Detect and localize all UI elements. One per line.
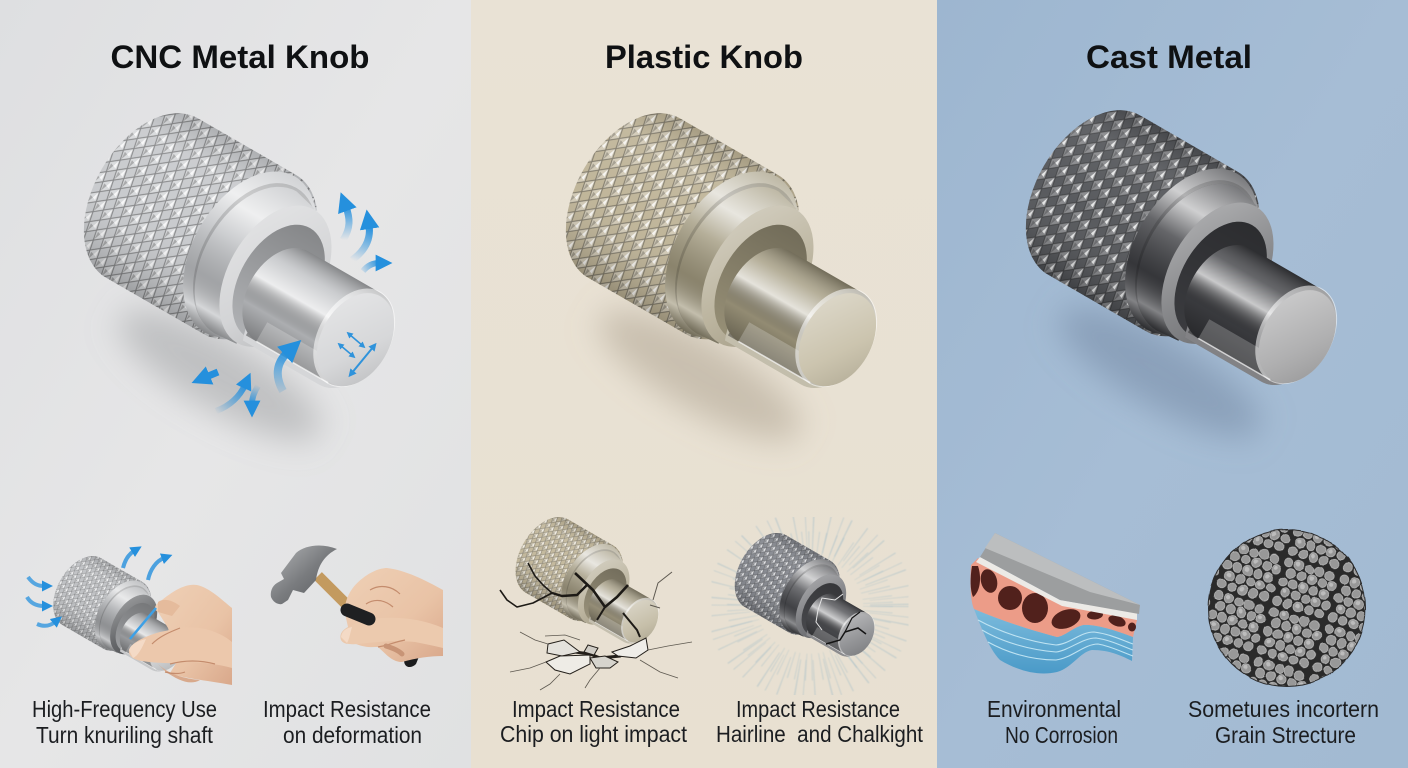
icon: gripping hand bbox=[340, 568, 443, 662]
icon: hand gripping knob bbox=[129, 585, 232, 685]
panel: plastic knob background bbox=[471, 0, 937, 768]
illustration: cast metal knob bbox=[998, 86, 1383, 415]
illustration: plastic knob bbox=[538, 89, 923, 418]
panel: CNC metal knob background bbox=[0, 0, 471, 768]
caption: Impact Resistance chip on light impact: Chip on light impact bbox=[500, 721, 688, 747]
shadow: CNC knob bbox=[103, 287, 337, 463]
icon: radial hairline burst bbox=[728, 532, 892, 680]
icon: black hammer grip bbox=[347, 610, 369, 619]
icon: hairline cracks bbox=[816, 594, 866, 644]
illustration: corrosion layer cross-section bbox=[970, 533, 1140, 674]
heading: CNC Metal Knob: CNC Metal Knob bbox=[110, 39, 370, 75]
icon: hammer head and handle bbox=[271, 546, 420, 667]
icon: blue airflow arrows bbox=[27, 551, 164, 626]
caption: Impact Resistance chip on light impact: Impact Resistance bbox=[512, 696, 680, 722]
caption: Impact Resistance on deformation: Impact Resistance bbox=[263, 696, 431, 722]
caption: Environmental no corrosion: Environmental bbox=[987, 696, 1121, 722]
caption: Impact Resistance on deformation: on deformation bbox=[283, 722, 422, 748]
illustration: cracked plastic knob bbox=[500, 506, 692, 690]
caption: High-Frequency Use: Turn knuriling shaft bbox=[36, 722, 214, 748]
illustration: hand holding hammer bbox=[271, 546, 443, 667]
illustration: knob turned by hand bbox=[27, 546, 232, 685]
panel: cast metal background bbox=[937, 0, 1408, 768]
caption: Sometuıes incortern grain structure: Grain Strecture bbox=[1215, 722, 1356, 748]
caption: High-Frequency Use: High-Frequency Use bbox=[32, 696, 217, 722]
caption: Impact Resistance hairline and chalkight: Hairline and Chalkight bbox=[716, 721, 924, 747]
shadow: plastic knob bbox=[583, 287, 817, 463]
icon: blue motion arrows around CNC knob bbox=[206, 207, 379, 411]
icon: cracks on knob bbox=[500, 563, 672, 637]
illustration: chalking grey knob bbox=[722, 522, 896, 670]
icon: small arrows on knob end face bbox=[340, 334, 374, 374]
caption: Impact Resistance hairline and chalkight: Impact Resistance bbox=[736, 696, 900, 722]
illustration: CNC metal knob bbox=[56, 89, 441, 418]
shadow: cast metal knob bbox=[1043, 284, 1277, 460]
heading: Cast Metal: Cast Metal bbox=[1086, 39, 1252, 75]
caption: Environmental no corrosion: No Corrosion bbox=[1005, 722, 1118, 748]
heading: Plastic Knob: Plastic Knob bbox=[605, 39, 803, 75]
caption: Sometuıes incortern grain structure: Sometuıes incortern bbox=[1188, 696, 1379, 722]
illustration: grain structure micrograph bbox=[1208, 529, 1366, 687]
icon: shattered chips bbox=[510, 632, 692, 690]
